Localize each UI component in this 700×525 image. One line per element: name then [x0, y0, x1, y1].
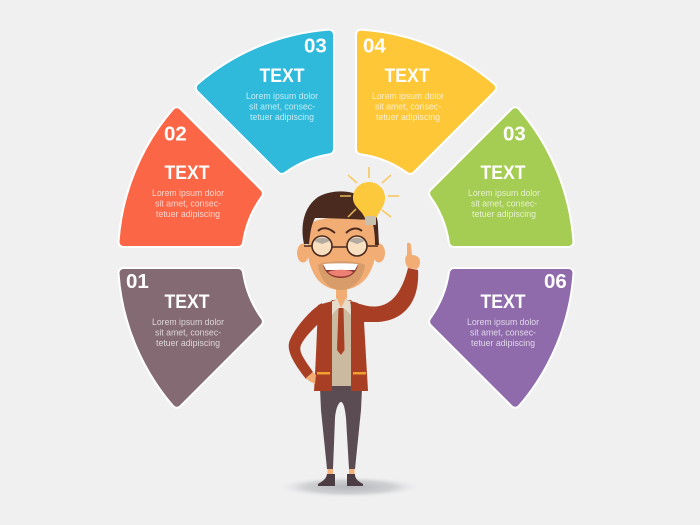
panel: 01 brown: tetuer adipiscing — [156, 338, 220, 349]
panel: 06 purple: sit amet, consec- — [470, 328, 536, 338]
panel: 03 blue: Lorem ipsum dolor — [246, 91, 318, 102]
shoes — [318, 474, 363, 486]
panel: 03 blue: sit amet, consec- — [249, 102, 315, 112]
panel: 02 red: sit amet, consec- — [155, 198, 221, 210]
hair highlights — [340, 196, 356, 217]
panel: 01 brown: sit amet, consec- — [155, 328, 221, 338]
panel: 03 green: Lorem ipsum dolor — [468, 188, 540, 199]
hand on hip — [306, 372, 316, 384]
panel: 04 yellow: 04 — [363, 34, 386, 58]
pocket flaps — [317, 372, 366, 374]
beard and moustache — [318, 261, 365, 290]
hand pointing up — [405, 243, 420, 269]
hair — [303, 191, 379, 245]
panel: 03 blue: TEXT — [260, 65, 305, 87]
panel: 03 blue: tetuer adipiscing — [250, 112, 314, 123]
legs and trousers — [320, 388, 362, 469]
panel: 04 yellow: tetuer adipiscing — [376, 112, 440, 123]
panel: 04 yellow: Lorem ipsum dolor — [372, 91, 444, 102]
panel: 02 red: tetuer adipiscing — [156, 209, 220, 220]
panel: 01 brown: 01 — [126, 270, 149, 293]
panel: 06 purple: Lorem ipsum dolor — [467, 317, 539, 328]
mouth — [323, 263, 358, 278]
panel: 02 red: TEXT — [164, 162, 210, 184]
raised arm — [350, 268, 418, 322]
light bulb — [348, 167, 399, 225]
shirt — [331, 300, 352, 388]
panel: 03 green: sit amet, consec- — [471, 198, 537, 210]
jacket — [314, 300, 368, 391]
neck — [336, 284, 347, 310]
panel: 03 green: TEXT — [480, 162, 526, 184]
character: man with glasses pointing up — [289, 167, 420, 486]
panel: 01 brown: Lorem ipsum dolor — [152, 317, 224, 328]
panel: 04 yellow: TEXT — [384, 65, 430, 87]
tie — [337, 308, 344, 355]
left arm on hip — [289, 303, 322, 379]
panel: 04 yellow — [361, 34, 491, 169]
panel: 06 purple — [434, 270, 568, 403]
panel: 03 green: 03 — [503, 122, 526, 146]
panel: 03 blue — [201, 34, 329, 169]
ground shadow — [275, 476, 423, 498]
panel: 06 purple: 06 — [544, 270, 567, 293]
face — [308, 218, 376, 290]
panel: 03 green — [434, 112, 568, 242]
ears — [297, 244, 309, 262]
panel: 06 purple: TEXT — [480, 291, 526, 313]
panel: 02 red: 02 — [164, 122, 187, 146]
panel: 03 blue: 03 — [304, 34, 327, 58]
panel: 01 brown: TEXT — [164, 291, 210, 313]
panel: 04 yellow: sit amet, consec- — [375, 102, 441, 112]
panel: 03 green: tetuer adipiscing — [472, 209, 536, 220]
glasses — [304, 236, 378, 256]
eyebrows — [318, 228, 362, 233]
panel: 06 purple: tetuer adipiscing — [471, 338, 535, 349]
panel: 01 brown — [124, 270, 258, 403]
collar — [332, 298, 351, 315]
panel: 02 red: Lorem ipsum dolor — [152, 188, 224, 199]
ankles — [328, 469, 354, 475]
panel: 02 red — [124, 112, 258, 242]
